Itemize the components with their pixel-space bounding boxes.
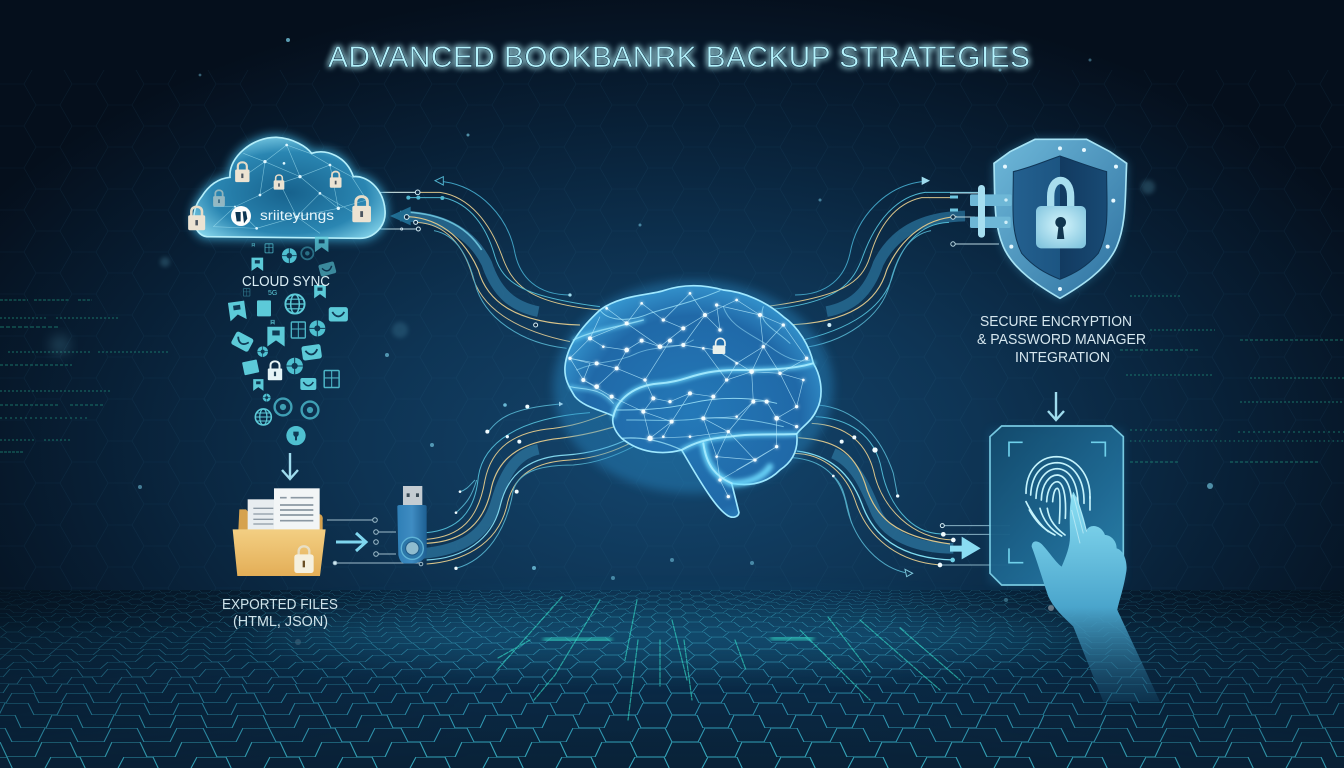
folder with documents	[233, 488, 326, 576]
bundle tube with arrowhead	[390, 207, 538, 312]
arrow: folder to USB	[336, 533, 366, 551]
shield rivets	[1003, 146, 1118, 291]
shield hinge bolts	[970, 185, 1012, 238]
shield	[970, 139, 1127, 298]
icon: shield padlock	[1036, 180, 1086, 248]
shield inner	[1013, 156, 1107, 279]
label: secure encryption and password manager integration: & PASSWORD MANAGER	[977, 332, 1146, 348]
shield connectors	[950, 193, 999, 246]
label: secure encryption and password manager integration: SECURE ENCRYPTION	[980, 314, 1132, 330]
cloud padlocks	[188, 162, 371, 230]
folder back	[238, 509, 323, 531]
brain glow	[553, 280, 833, 493]
background hex texture	[0, 70, 1344, 600]
icon: falling padlock	[268, 361, 282, 380]
panel glow	[990, 430, 1123, 583]
fingerprint panel	[950, 426, 1160, 702]
label: exported files	[222, 597, 338, 630]
label: exported files: EXPORTED FILES	[222, 597, 338, 613]
USB drive	[397, 486, 427, 563]
documents	[248, 488, 320, 533]
connection bundle: USB to brain	[423, 402, 633, 570]
connection bundle: brain to fingerprint	[792, 405, 1010, 577]
label: secure encryption and password manager integration: INTEGRATION	[1015, 350, 1110, 366]
title: ADVANCED BOOKBANRK BACKUP STRATEGIES	[328, 41, 1030, 74]
folder front	[233, 529, 326, 576]
neural network lines	[570, 293, 807, 497]
cloud	[188, 137, 385, 238]
hand	[1032, 492, 1160, 702]
brain	[553, 280, 833, 517]
folder to USB connectors	[327, 518, 423, 566]
icon: folder padlock	[294, 546, 314, 573]
cloud logo text: sriiteyungs	[260, 208, 334, 223]
glow particles	[50, 38, 1213, 645]
floor data streaks	[497, 597, 960, 720]
background data streams: left	[0, 300, 170, 452]
label: secure encryption and password manager integration	[977, 314, 1146, 366]
cloud body	[194, 137, 385, 238]
brain outline	[565, 286, 821, 517]
connection bundle: cloud to brain	[380, 177, 600, 348]
hexagon grid floor	[0, 590, 1344, 768]
label: 5G: 5G	[268, 290, 277, 297]
label: exported files: (HTML, JSON)	[233, 614, 328, 630]
brain folds glow	[570, 320, 813, 483]
shield glow	[994, 139, 1127, 298]
arrow: shield down to fingerprint	[1048, 392, 1064, 420]
shield rim	[994, 139, 1127, 298]
brain folds	[570, 291, 813, 483]
icons: falling bookmarks	[228, 237, 348, 445]
panel corner brackets	[1009, 442, 1105, 563]
USB connector	[403, 486, 422, 505]
background data streams: right	[1120, 296, 1344, 462]
icon: brain padlock	[713, 338, 725, 354]
fingerprint	[1026, 457, 1090, 536]
neural nodes	[568, 292, 808, 498]
connection bundle: shield to brain	[765, 177, 982, 348]
cloud logo	[231, 206, 251, 226]
arrow into panel	[950, 537, 981, 559]
arrow: sync down to folder	[282, 453, 298, 479]
cloud network	[213, 145, 367, 233]
label: cloud sync: CLOUD SYNC	[242, 274, 330, 290]
panel body	[990, 426, 1123, 585]
cloud glow	[194, 137, 385, 238]
USB body	[397, 505, 427, 563]
